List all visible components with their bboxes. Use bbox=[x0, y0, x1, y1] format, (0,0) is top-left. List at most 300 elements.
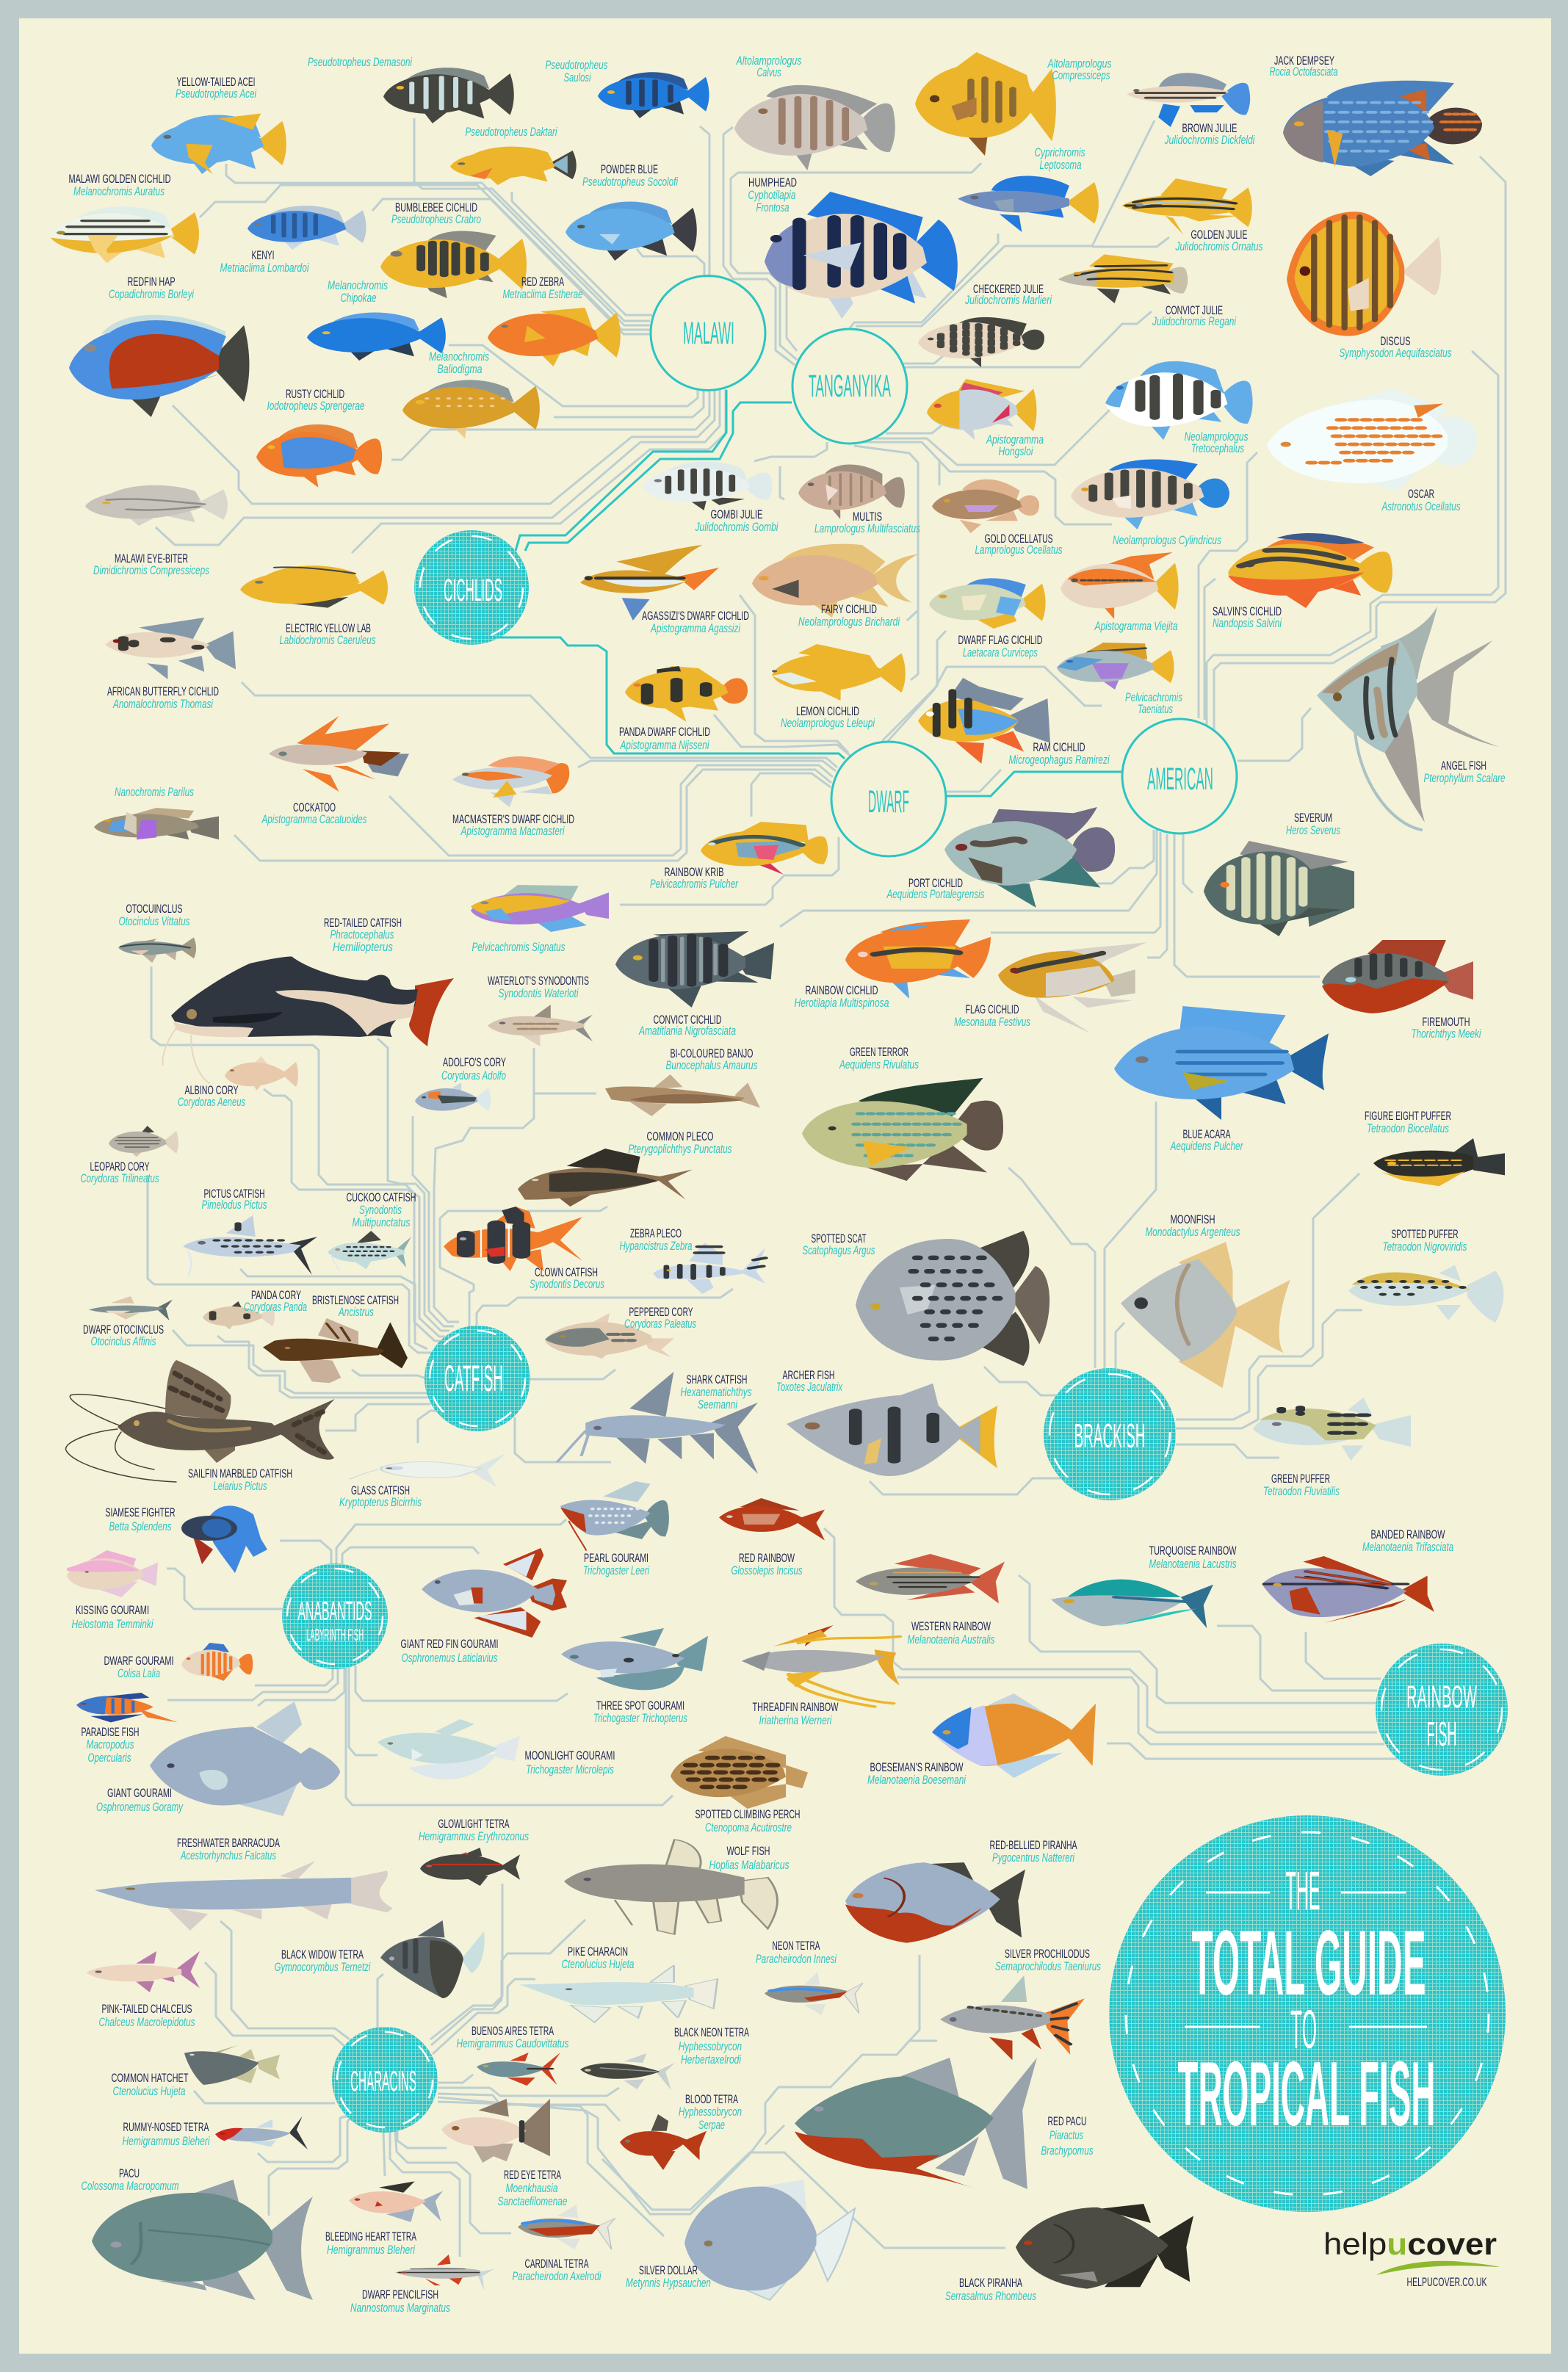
fish: cyprichromis leptosoma bbox=[958, 176, 1099, 232]
label: multis: MULTIS bbox=[853, 510, 882, 524]
label: flag cichlid bbox=[954, 1002, 1030, 1029]
poster: TANGANYIKA bbox=[809, 369, 891, 404]
label: redfin hap: Copadichromis Borleyi bbox=[109, 287, 195, 301]
label: black widow tetra: BLACK WIDOW TETRA bbox=[281, 1948, 364, 1961]
fish: siamese fighter bbox=[181, 1505, 267, 1573]
fish: african butterfly cichlid bbox=[105, 618, 236, 679]
logo: helpucover bbox=[1323, 2227, 1500, 2289]
label: adolfo's cory: ADOLFO'S CORY bbox=[443, 1055, 506, 1069]
label: viejita: Apistogramma Viejita bbox=[1094, 619, 1178, 633]
label: pacu: Colossoma Macropomum bbox=[81, 2179, 179, 2193]
label: albino cory: ALBINO CORY bbox=[185, 1083, 238, 1097]
label: pelvicachromis taeniatus: Taeniatus bbox=[1138, 702, 1173, 716]
label: boeseman's rainbow: BOESEMAN'S RAINBOW bbox=[870, 1760, 964, 1774]
fish: green puffer bbox=[1253, 1397, 1411, 1461]
fish: kenyi bbox=[248, 206, 366, 250]
label: golden julie: Julidochromis Ornatus bbox=[1175, 239, 1263, 253]
fish: lemon cichlid bbox=[772, 644, 906, 701]
fish: severum bbox=[1204, 841, 1354, 936]
label: pacu bbox=[81, 2166, 179, 2193]
hub: dwarf: DWARF bbox=[868, 784, 909, 820]
label: port cichlid: Aequidens Portalegrensis bbox=[886, 887, 985, 901]
label: paradise fish: Macropodus bbox=[87, 1738, 134, 1751]
hub: american: AMERICAN bbox=[1147, 762, 1213, 797]
label: bi-coloured banjo bbox=[665, 1046, 758, 1072]
label: black piranha: Serrasalmus Rhombeus bbox=[945, 2289, 1036, 2303]
label: paradise fish: PARADISE FISH bbox=[81, 1725, 140, 1739]
label: red pacu: Brachypomus bbox=[1041, 2144, 1094, 2158]
label: severum: Heros Severus bbox=[1286, 823, 1340, 837]
label: golden julie bbox=[1175, 228, 1263, 253]
fish: electric yellow lab bbox=[240, 565, 388, 608]
label: boeseman's rainbow: Melanotaenia Boesemani bbox=[867, 1773, 967, 1787]
label: glass catfish bbox=[339, 1483, 422, 1509]
label: electric yellow lab: Labidochromis Caeruleus bbox=[279, 633, 376, 647]
fish: rummy-nosed tetra bbox=[215, 2116, 308, 2149]
label: rainbow krib: Pelvicachromis Pulcher bbox=[650, 877, 739, 891]
label: dwarf gourami: DWARF GOURAMI bbox=[104, 1654, 173, 1668]
fish: adolfo's cory bbox=[415, 1082, 491, 1112]
label: green puffer bbox=[1263, 1472, 1340, 1498]
fish: dwarf gourami bbox=[181, 1643, 253, 1681]
label: blood tetra bbox=[679, 2092, 742, 2132]
label: red pacu: Piaractus bbox=[1049, 2128, 1083, 2142]
hub: catfish bbox=[424, 1326, 530, 1431]
fish: pseudotropheus demasoni bbox=[383, 68, 514, 123]
fish: figure eight puffer bbox=[1373, 1138, 1505, 1186]
label: angel fish: Pterophyllum Scalare bbox=[1423, 771, 1506, 785]
label: neon tetra: Paracheirodon Innesi bbox=[756, 1952, 837, 1966]
label: common pleco bbox=[629, 1129, 732, 1156]
label: giant red fin gourami: Osphronemus Laticlavius bbox=[401, 1651, 498, 1665]
label: spotted scat bbox=[802, 1232, 875, 1257]
label: macmaster's dwarf cichlid: MACMASTER'S DWARF CICHLID bbox=[452, 812, 574, 826]
label: lemon cichlid: LEMON CICHLID bbox=[796, 704, 859, 718]
label: discus: DISCUS bbox=[1381, 334, 1410, 348]
label: chipokae: Chipokae bbox=[341, 291, 376, 305]
hub: rainbow fish: FISH bbox=[1426, 1715, 1457, 1753]
label: spotted climbing perch: Ctenopoma Acutirostre bbox=[705, 1820, 792, 1834]
fish: agassizi's dwarf cichlid bbox=[580, 545, 719, 621]
label: panda cory: Corydoras Panda bbox=[244, 1300, 307, 1314]
label: red-bellied piranha: RED-BELLIED PIRANHA bbox=[990, 1838, 1077, 1852]
label: pacu: PACU bbox=[119, 2166, 140, 2180]
fish: neon tetra bbox=[765, 1972, 863, 2015]
label: glowlight tetra: GLOWLIGHT TETRA bbox=[438, 1817, 510, 1831]
label: western rainbow bbox=[908, 1619, 995, 1646]
fish: peppered cory bbox=[545, 1313, 674, 1359]
label: rusty cichlid: RUSTY CICHLID bbox=[286, 387, 344, 401]
label: boeseman's rainbow bbox=[867, 1760, 967, 1787]
label: glowlight tetra: Hemigrammus Erythrozonus bbox=[419, 1829, 529, 1843]
fish: pseudotropheus saulosi bbox=[598, 72, 709, 118]
label: humphead: Cyphotilapia bbox=[748, 188, 796, 202]
label: red-bellied piranha: Pygocentrus Nattereri bbox=[992, 1851, 1075, 1865]
label: rainbow krib bbox=[650, 865, 739, 891]
label: rainbow krib: RAINBOW KRIB bbox=[664, 865, 724, 879]
label: powder blue: POWDER BLUE bbox=[601, 162, 658, 176]
label: turquoise rainbow: Melanotaenia Lacustris bbox=[1149, 1557, 1237, 1571]
fish: banded rainbow bbox=[1262, 1556, 1434, 1623]
label: western rainbow: Melanotaenia Australis bbox=[908, 1632, 995, 1646]
fish: freshwater barracuda bbox=[95, 1861, 393, 1931]
label: rainbow cichlid: Herotilapia Multispinosa bbox=[795, 996, 889, 1010]
label: red zebra bbox=[502, 275, 583, 301]
fish: pink-tailed chalceus bbox=[86, 1951, 200, 1992]
label: ram cichlid: Microgeophagus Ramirezi bbox=[1009, 753, 1110, 767]
hub: malawi: MALAWI bbox=[683, 316, 734, 351]
label: cuckoo catfish: CUCKOO CATFISH bbox=[347, 1190, 416, 1204]
label: clown catfish: CLOWN CATFISH bbox=[535, 1265, 598, 1279]
label: pike characin bbox=[561, 1945, 635, 1971]
teal hub connectors bbox=[498, 390, 1121, 796]
fish: cardinal tetra bbox=[518, 2205, 615, 2249]
fish: silver prochilodus bbox=[940, 1975, 1085, 2060]
fish: pelvicachromis signatus bbox=[471, 885, 609, 932]
hub: brackish bbox=[1044, 1368, 1176, 1500]
label: angel fish: ANGEL FISH bbox=[1441, 759, 1486, 773]
label: black neon tetra: Hyphessobrycon bbox=[679, 2039, 742, 2053]
hub: cichlids: CICHLIDS bbox=[444, 573, 502, 608]
label: yellow-tailed acei: YELLOW-TAILED ACEI bbox=[176, 75, 256, 89]
label: red pacu bbox=[1041, 2114, 1094, 2158]
label: pike characin: Ctenolucius Hujeta bbox=[561, 1957, 635, 1971]
label: agassizi's dwarf cichlid: Apistogramma Agassizi bbox=[650, 621, 741, 635]
label: bleeding heart tetra: BLEEDING HEART TETRA bbox=[325, 2230, 416, 2243]
label: pictus catfish: PICTUS CATFISH bbox=[204, 1187, 264, 1201]
fish: macmaster's dwarf cichlid bbox=[452, 756, 569, 807]
fish: panda cory bbox=[203, 1301, 275, 1329]
label: buenos aires tetra: Hemigrammus Caudovittatus bbox=[457, 2036, 569, 2050]
hub: anabantids bbox=[282, 1563, 388, 1669]
label: three spot gourami bbox=[593, 1699, 687, 1725]
label: turquoise rainbow bbox=[1149, 1544, 1237, 1571]
label: zebra pleco: Hypancistrus Zebra bbox=[620, 1239, 692, 1253]
label: firemouth bbox=[1412, 1015, 1481, 1041]
fish: three spot gourami bbox=[561, 1628, 708, 1690]
label: red pacu: RED PACU bbox=[1047, 2114, 1087, 2128]
label: electric yellow lab: ELECTRIC YELLOW LAB bbox=[286, 621, 371, 635]
label: common pleco: Pterygoplichthys Punctatus bbox=[629, 1142, 732, 1156]
label: powder blue bbox=[582, 162, 679, 189]
label: clown catfish: Synodontis Decorus bbox=[530, 1277, 604, 1291]
hub: catfish: CATFISH bbox=[444, 1358, 503, 1399]
label: jack dempsey bbox=[1269, 54, 1338, 79]
label: cardinal tetra: Paracheirodon Axelrodi bbox=[513, 2269, 601, 2283]
fish: bleeding heart tetra bbox=[349, 2181, 443, 2222]
label: black widow tetra: Gymnocorymbus Ternetzi bbox=[275, 1960, 371, 1974]
label: banded rainbow bbox=[1362, 1527, 1453, 1554]
label: spotted scat: Scatophagus Argus bbox=[802, 1243, 875, 1257]
fish: panda dwarf cichlid bbox=[625, 666, 748, 722]
label: archer fish: ARCHER FISH bbox=[783, 1368, 834, 1382]
label: baliodigma bbox=[429, 350, 489, 376]
label: cyprichromis leptosoma bbox=[1034, 145, 1085, 172]
label: convict cichlid: CONVICT CICHLID bbox=[654, 1013, 721, 1027]
label: wolf fish: WOLF FISH bbox=[727, 1844, 770, 1858]
logo: helpucover: helpucover bbox=[1323, 2227, 1497, 2261]
label: blood tetra: BLOOD TETRA bbox=[685, 2092, 738, 2106]
label: spotted puffer: SPOTTED PUFFER bbox=[1391, 1227, 1459, 1241]
fish: red zebra bbox=[488, 308, 621, 366]
label: convict julie: CONVICT JULIE bbox=[1166, 303, 1223, 317]
fish: red rainbow bbox=[719, 1498, 825, 1541]
fish: bi-coloured banjo bbox=[605, 1074, 760, 1116]
label: discus bbox=[1340, 334, 1452, 360]
label: rummy-nosed tetra: Hemigrammus Bleheri bbox=[122, 2134, 210, 2148]
label: salvin's cichlid: SALVIN'S CICHLID bbox=[1213, 604, 1282, 618]
label: cockatoo: COCKATOO bbox=[293, 800, 336, 814]
label: calvus: Calvus bbox=[756, 65, 781, 79]
logo: helpucover: HELPUCOVER.CO.UK bbox=[1407, 2275, 1487, 2289]
label: waterlot's synodontis bbox=[488, 974, 589, 1000]
fish: leopard cory bbox=[109, 1126, 178, 1157]
label: neon tetra bbox=[756, 1939, 837, 1966]
label: dwarf otocinclus: DWARF OTOCINCLUS bbox=[83, 1323, 164, 1337]
label: threadfin rainbow bbox=[752, 1700, 839, 1727]
label: shark catfish bbox=[680, 1373, 752, 1411]
label: cylindricus: Neolamprologus Cylindricus bbox=[1113, 533, 1221, 547]
label: green puffer: GREEN PUFFER bbox=[1271, 1472, 1330, 1486]
label: hongsloi bbox=[986, 433, 1044, 458]
fish: red-tailed catfish bbox=[163, 956, 454, 1083]
label: tretocephalus bbox=[1184, 430, 1249, 455]
label: threadfin rainbow: THREADFIN RAINBOW bbox=[752, 1700, 839, 1714]
label: malawi golden cichlid bbox=[69, 172, 170, 198]
fish: redfin hap bbox=[69, 315, 249, 417]
label: panda cory bbox=[244, 1288, 307, 1314]
label: fairy cichlid bbox=[798, 602, 900, 629]
label: bleeding heart tetra bbox=[325, 2230, 416, 2257]
label: pictus catfish: Pimelodus Pictus bbox=[201, 1198, 267, 1212]
label: green terror: Aequidens Rivulatus bbox=[839, 1057, 919, 1071]
fish: oscar bbox=[1267, 389, 1477, 491]
fish: nanochromis parilus bbox=[94, 808, 219, 839]
label: rainbow cichlid: RAINBOW CICHLID bbox=[805, 983, 878, 997]
label: red rainbow: Glossolepis Incisus bbox=[731, 1563, 803, 1577]
label: gombi julie: GOMBI JULIE bbox=[711, 507, 762, 521]
fish: malawi golden cichlid bbox=[51, 206, 199, 263]
label: banded rainbow: BANDED RAINBOW bbox=[1370, 1527, 1445, 1541]
fish: clown catfish bbox=[444, 1207, 582, 1271]
hub: tanganyika bbox=[792, 329, 907, 444]
fish: green terror bbox=[802, 1078, 1003, 1181]
fish: archer fish bbox=[787, 1384, 997, 1476]
label: glowlight tetra bbox=[419, 1817, 529, 1843]
label: yellow-tailed acei bbox=[176, 75, 257, 101]
fish: pearl gourami bbox=[560, 1481, 669, 1550]
label: brown julie: BROWN JULIE bbox=[1182, 121, 1237, 135]
fish: pseudotropheus daktari bbox=[450, 147, 577, 185]
title badge: THE bbox=[1285, 1860, 1320, 1921]
label: spotted puffer: Tetraodon Nigroviridis bbox=[1382, 1240, 1467, 1254]
label: humphead bbox=[748, 176, 797, 214]
label: demasoni: Pseudotropheus Demasoni bbox=[308, 55, 413, 69]
fish: melanochromis baliodigma bbox=[402, 380, 540, 438]
label: panda dwarf cichlid: Apistogramma Nijsseni bbox=[620, 738, 709, 752]
label: multis: Lamprologus Multifasciatus bbox=[814, 521, 920, 535]
label: otocuinclus: OTOCUINCLUS bbox=[126, 902, 182, 916]
label: lemon cichlid bbox=[781, 704, 875, 730]
label: freshwater barracuda: Acestrorhynchus Falcatus bbox=[180, 1848, 276, 1862]
label: convict julie: Julidochromis Regani bbox=[1152, 314, 1237, 328]
label: bumblebee cichlid: BUMBLEBEE CICHLID bbox=[395, 200, 477, 214]
label: malawi golden cichlid: MALAWI GOLDEN CICHLID bbox=[69, 172, 170, 186]
fish: humphead bbox=[765, 192, 958, 319]
label: cardinal tetra: CARDINAL TETRA bbox=[524, 2257, 589, 2271]
hub: anabantids: LABYRINTH FISH bbox=[306, 1625, 364, 1644]
label: saulosi bbox=[545, 58, 608, 84]
label: fairy cichlid: Neolamprologus Brichardi bbox=[798, 615, 900, 629]
label: macmaster's dwarf cichlid: Apistogramma Macmasteri bbox=[460, 824, 565, 838]
label: salvin's cichlid bbox=[1213, 604, 1282, 630]
label: peppered cory: PEPPERED CORY bbox=[629, 1305, 693, 1319]
label: redfin hap bbox=[109, 275, 195, 301]
label: port cichlid bbox=[886, 876, 985, 901]
label: saulosi: Pseudotropheus bbox=[545, 58, 608, 72]
fish: giant red fin gourami bbox=[422, 1548, 567, 1638]
fish: altolamprologus compressiceps bbox=[915, 52, 1056, 156]
label: malawi golden cichlid: Melanochromis Auratus bbox=[73, 184, 165, 198]
label: freshwater barracuda bbox=[177, 1836, 280, 1862]
label: dwarf pencilfish bbox=[350, 2288, 450, 2315]
fish: spotted scat bbox=[856, 1231, 1049, 1366]
hub: rainbow fish bbox=[1376, 1644, 1508, 1776]
fish: neolamprologus tretocephalus bbox=[1105, 361, 1253, 440]
fish: multis bbox=[798, 465, 905, 519]
label: leopard cory: LEOPARD CORY bbox=[90, 1160, 150, 1174]
label: gold ocellatus: GOLD OCELLATUS bbox=[984, 532, 1053, 546]
fish: powder blue bbox=[566, 201, 697, 261]
label: black neon tetra: Herbertaxelrodi bbox=[681, 2053, 742, 2067]
label: bi-coloured banjo: BI-COLOURED BANJO bbox=[670, 1046, 754, 1060]
label: green terror: GREEN TERROR bbox=[850, 1045, 908, 1059]
label: red eye tetra: RED EYE TETRA bbox=[504, 2168, 561, 2182]
fish: dwarf otocinclus bbox=[89, 1296, 173, 1320]
label: peppered cory: Corydoras Paleatus bbox=[624, 1317, 696, 1331]
fish: spotted climbing perch bbox=[671, 1736, 808, 1809]
fish: spotted puffer bbox=[1348, 1265, 1503, 1323]
label: common hatchet: COMMON HATCHET bbox=[112, 2071, 188, 2085]
fish: bumblebee cichlid bbox=[380, 231, 527, 298]
label: cardinal tetra bbox=[513, 2257, 601, 2283]
label: archer fish bbox=[776, 1368, 842, 1394]
label: red-bellied piranha bbox=[990, 1838, 1077, 1865]
fish: black piranha bbox=[1016, 2204, 1193, 2289]
fish: pike characin bbox=[519, 1965, 718, 2022]
fish: salvin's cichlid bbox=[1228, 533, 1392, 608]
hub: malawi bbox=[651, 276, 765, 391]
fish: silver dollar bbox=[684, 2180, 855, 2300]
label: bi-coloured banjo: Bunocephalus Amaurus bbox=[665, 1058, 758, 1072]
label: pelvicachromis taeniatus: Pelvicachromis bbox=[1125, 690, 1182, 704]
label: electric yellow lab bbox=[279, 621, 376, 647]
label: tretocephalus: Tretocephalus bbox=[1191, 441, 1244, 455]
label: giant gourami: GIANT GOURAMI bbox=[107, 1786, 172, 1800]
label: giant gourami bbox=[96, 1786, 184, 1814]
fish: rusty cichlid bbox=[256, 424, 382, 488]
fish: checkered julie bbox=[918, 317, 1044, 367]
fish: buenos aires tetra bbox=[477, 2053, 560, 2086]
label: kissing gourami: KISSING GOURAMI bbox=[76, 1603, 149, 1617]
label: shark catfish: Hexanematichthys bbox=[680, 1385, 752, 1399]
label: bleeding heart tetra: Hemigrammus Bleheri bbox=[327, 2243, 416, 2257]
fish: gold ocellatus bbox=[932, 480, 1039, 533]
label: albino cory bbox=[178, 1083, 245, 1109]
hub: brackish: BRACKISH bbox=[1074, 1417, 1146, 1455]
label: flag cichlid: FLAG CICHLID bbox=[965, 1002, 1019, 1016]
label: sailfin marbled catfish: SAILFIN MARBLED CATFISH bbox=[188, 1467, 292, 1480]
label: firemouth: FIREMOUTH bbox=[1422, 1015, 1470, 1029]
label: giant gourami: Osphronemus Goramy bbox=[96, 1800, 184, 1814]
label: black neon tetra: BLACK NEON TETRA bbox=[674, 2025, 749, 2039]
fish: pelvicachromis taeniatus bbox=[1057, 643, 1174, 690]
label: checkered julie: CHECKERED JULIE bbox=[973, 282, 1044, 296]
label: moonlight gourami: MOONLIGHT GOURAMI bbox=[524, 1749, 615, 1762]
fish: red eye tetra bbox=[441, 2099, 550, 2163]
label: silver dollar bbox=[626, 2263, 711, 2290]
label: blood tetra: Hyphessobrycon bbox=[679, 2105, 742, 2119]
label: bristlenose catfish: Ancistrus bbox=[338, 1305, 374, 1319]
label: african butterfly cichlid: AFRICAN BUTTERFLY CICHLID bbox=[107, 684, 219, 698]
label: red rainbow: RED RAINBOW bbox=[739, 1551, 795, 1565]
label: pink-tailed chalceus: PINK-TAILED CHALCEUS bbox=[101, 2002, 192, 2016]
label: blue acara bbox=[1170, 1127, 1243, 1153]
label: spotted climbing perch: SPOTTED CLIMBING PERCH bbox=[695, 1807, 801, 1821]
label: wolf fish bbox=[709, 1844, 790, 1872]
fish: western rainbow bbox=[856, 1554, 1005, 1604]
label: convict cichlid bbox=[638, 1013, 736, 1038]
label: black widow tetra bbox=[275, 1948, 371, 1974]
label: golden julie: GOLDEN JULIE bbox=[1191, 228, 1247, 242]
fish: paradise fish bbox=[76, 1693, 178, 1722]
label: pearl gourami: PEARL GOURAMI bbox=[584, 1551, 648, 1565]
label: dwarf pencilfish: Nannostomus Marginatus bbox=[350, 2301, 450, 2315]
label: blue acara: BLUE ACARA bbox=[1182, 1127, 1231, 1141]
hub: rainbow fish: RAINBOW bbox=[1406, 1679, 1477, 1715]
label: african butterfly cichlid bbox=[107, 684, 219, 711]
fish: common pleco bbox=[518, 1149, 693, 1207]
label: buenos aires tetra: BUENOS AIRES TETRA bbox=[472, 2024, 554, 2038]
label: moonlight gourami: Trichogaster Microlepis bbox=[526, 1762, 614, 1776]
label: redfin hap: REDFIN HAP bbox=[128, 275, 175, 289]
label: cockatoo: Apistogramma Cacatuoides bbox=[261, 812, 367, 826]
label: discus: Symphysodon Aequifasciatus bbox=[1340, 346, 1452, 360]
label: glass catfish: GLASS CATFISH bbox=[351, 1483, 410, 1497]
label: western rainbow: WESTERN RAINBOW bbox=[911, 1619, 991, 1633]
fish: melanochromis chipokae bbox=[307, 312, 446, 361]
label: baliodigma: Baliodigma bbox=[438, 362, 482, 376]
label: jack dempsey: JACK DEMPSEY bbox=[1274, 54, 1334, 68]
label: red-tailed catfish: Hemiliopterus bbox=[333, 940, 393, 954]
label: silver prochilodus: Semaprochilodus Taeniurus bbox=[995, 1959, 1101, 1973]
label: common hatchet bbox=[112, 2071, 188, 2098]
label: pike characin: PIKE CHARACIN bbox=[568, 1945, 628, 1959]
fish: red pacu bbox=[795, 2058, 1037, 2189]
fish: convict cichlid bbox=[615, 931, 774, 1008]
label: dwarf pencilfish: DWARF PENCILFISH bbox=[362, 2288, 438, 2302]
label: moonfish bbox=[1146, 1212, 1240, 1239]
fish: blood tetra bbox=[620, 2114, 707, 2170]
label: malawi eye-biter bbox=[93, 552, 209, 577]
label: malawi eye-biter: Dimidichromis Compressiceps bbox=[93, 563, 209, 577]
label: baliodigma: Melanochromis bbox=[429, 350, 489, 364]
label: silver dollar: SILVER DOLLAR bbox=[639, 2263, 698, 2277]
fish: boeseman's rainbow bbox=[932, 1693, 1096, 1778]
label: silver prochilodus: SILVER PROCHILODUS bbox=[1005, 1947, 1090, 1961]
label: paradise fish bbox=[81, 1725, 140, 1765]
label: kissing gourami bbox=[72, 1603, 153, 1631]
